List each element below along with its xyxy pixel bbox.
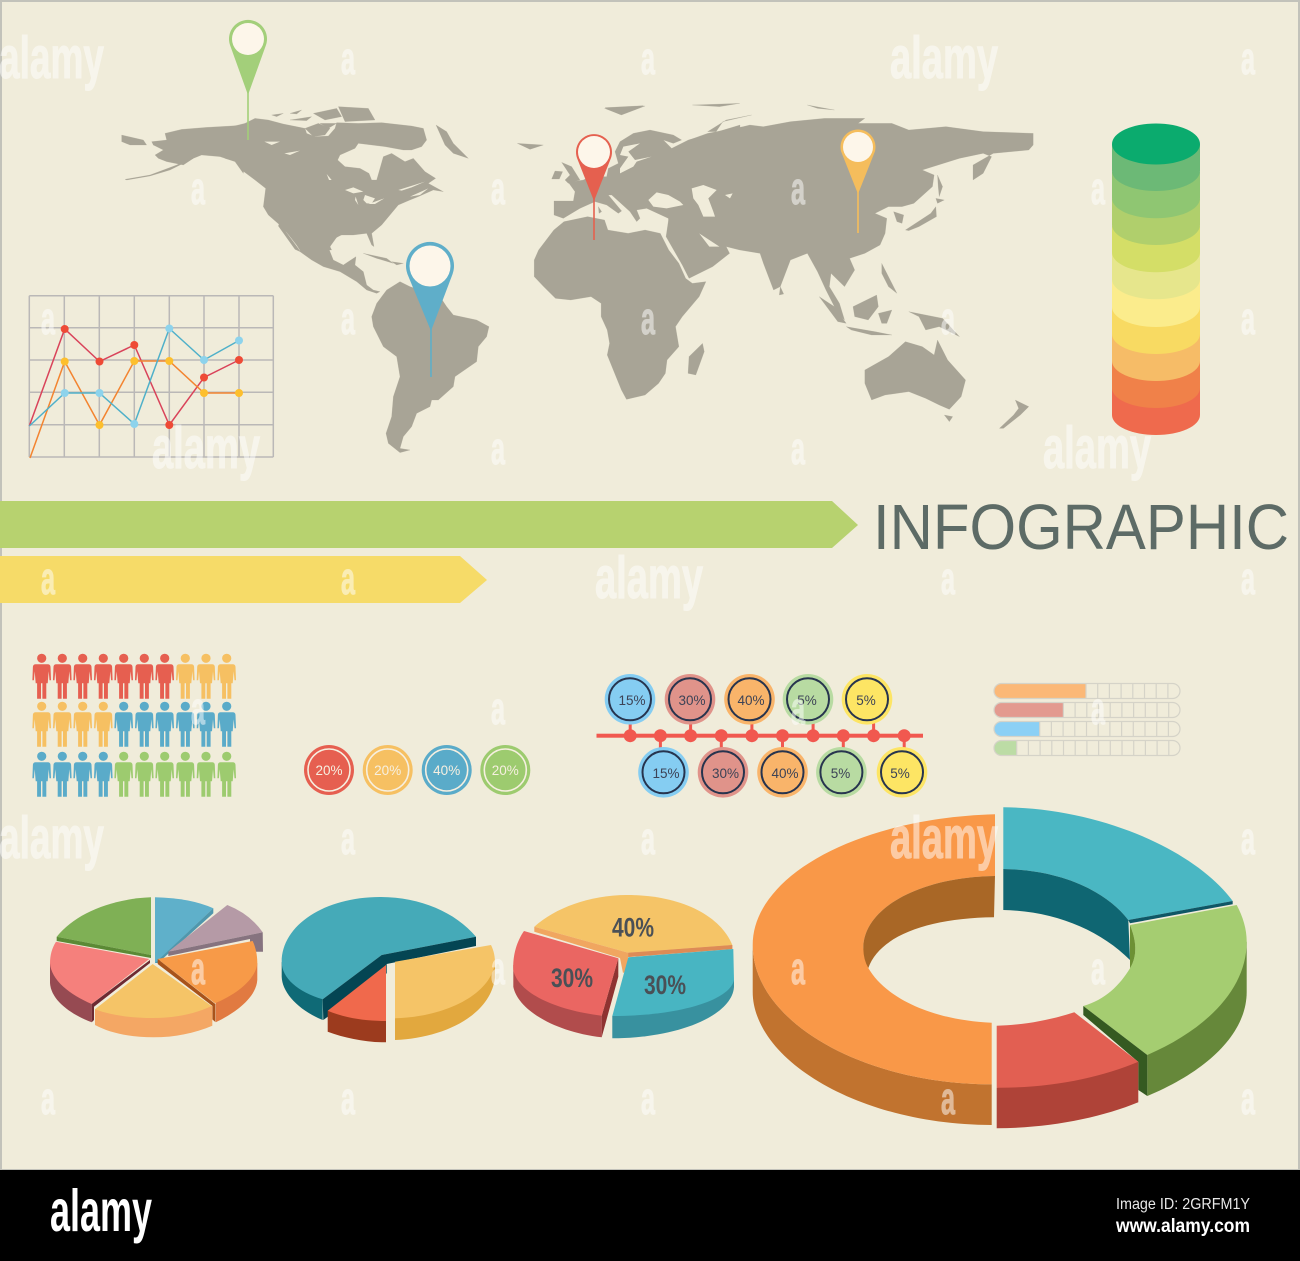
progress bar: blue — [994, 722, 1180, 736]
badge: green 20%: 20% — [492, 763, 519, 778]
timeline top: 15%: 15% — [618, 693, 646, 708]
map: Canada and United States — [225, 107, 443, 250]
badge: blue 40%: 40% — [433, 763, 460, 778]
progress bar: green — [994, 740, 1180, 756]
people row 1 — [32, 654, 236, 699]
pie chart: three slices with large blue — [282, 897, 495, 1042]
timeline axis with nodes — [596, 720, 923, 752]
map pin: orange — [840, 130, 876, 233]
watermarks: alamy — [890, 25, 998, 91]
progress bar: orange — [994, 684, 1180, 698]
map: Africa, Asia and Oceania — [534, 103, 1033, 428]
watermarks: alamy — [890, 805, 998, 871]
slice: teal 30%: 30% — [644, 970, 686, 1000]
badge: yellow 20%: 20% — [374, 763, 401, 778]
watermarks: a — [791, 423, 806, 474]
world map — [122, 103, 1033, 453]
watermarks: a — [641, 813, 656, 864]
map pin: blue — [406, 242, 454, 377]
watermarks: a — [41, 1073, 56, 1124]
slice: green — [57, 897, 151, 958]
slice: 40% — [534, 895, 732, 973]
watermarks: a — [641, 293, 656, 344]
watermarks: a — [341, 813, 356, 864]
timeline bottom: 40% — [757, 747, 808, 798]
watermarks: a — [491, 943, 506, 994]
watermarks: a — [341, 553, 356, 604]
timeline top: 30%: 30% — [678, 693, 706, 708]
timeline top: 5% green — [783, 674, 833, 725]
slice: teal large — [282, 897, 476, 1020]
watermarks: a — [191, 943, 206, 994]
watermarks: a — [791, 163, 806, 214]
timeline top: 5% yellow: 5% — [856, 693, 876, 708]
watermarks: a — [41, 553, 56, 604]
watermarks: a — [791, 683, 806, 734]
timeline top: 5% green: 5% — [797, 693, 817, 708]
watermarks: alamy — [0, 805, 104, 871]
timeline bottom: 15% — [638, 747, 689, 798]
timeline bottom: 15%: 15% — [652, 766, 680, 781]
watermarks: a — [491, 683, 506, 734]
watermarks: a — [1091, 943, 1106, 994]
watermarks: a — [1241, 553, 1256, 604]
watermarks: a — [491, 163, 506, 214]
watermarks: a — [641, 1073, 656, 1124]
line chart — [29, 296, 273, 458]
slice: 40%: 40% — [612, 912, 654, 942]
watermarks: a — [1241, 33, 1256, 84]
watermarks: a — [941, 293, 956, 344]
footer url: www.alamy.com — [1115, 1216, 1250, 1237]
footer logo: alamy — [50, 1178, 152, 1244]
map pin: green — [229, 20, 267, 140]
timeline top: 5% yellow — [842, 674, 892, 725]
timeline — [596, 674, 927, 798]
timeline top: 30% — [665, 674, 715, 725]
watermarks: a — [1241, 293, 1256, 344]
slice: yellow — [95, 964, 212, 1037]
people row 3 — [32, 752, 236, 797]
series: blue line — [29, 324, 243, 428]
series: orange line — [30, 357, 243, 458]
arrow banner: yellow — [0, 556, 487, 603]
progress bars — [994, 684, 1180, 756]
slice: mauve — [168, 905, 263, 956]
people row 2 — [32, 702, 236, 747]
badge: red 20%: 20% — [315, 763, 343, 778]
watermarks: alamy — [595, 545, 703, 611]
people pictogram — [32, 654, 236, 797]
donut segment: orange — [753, 814, 995, 1125]
timeline bottom: 40%: 40% — [771, 766, 799, 781]
watermarks: a — [341, 293, 356, 344]
watermarks: alamy — [152, 415, 260, 481]
watermarks: a — [191, 683, 206, 734]
slice: red small — [328, 965, 386, 1042]
badge: red 20% — [304, 745, 354, 795]
percentage badges — [304, 745, 530, 795]
watermarks: a — [941, 1073, 956, 1124]
stacked cylinder — [1112, 124, 1200, 435]
watermarks: a — [1241, 1073, 1256, 1124]
footer bar — [0, 1170, 1300, 1261]
slice: yellow — [395, 945, 495, 1040]
donut segment: green — [1083, 905, 1247, 1096]
pie chart: 40 30 30 — [513, 895, 734, 1038]
badge: green 20% — [480, 745, 530, 795]
timeline bottom: 5% yellow — [877, 747, 927, 798]
watermarks: a — [1241, 813, 1256, 864]
timeline bottom: 5% yellow: 5% — [890, 766, 910, 781]
map: Alaska, Mexico, Caribbean and South America — [122, 125, 543, 453]
map: Europe — [552, 106, 740, 245]
pie chart: six exploded slices — [50, 897, 263, 1037]
watermarks: a — [341, 33, 356, 84]
badge: blue 40% — [422, 745, 472, 795]
slice: pink — [50, 942, 150, 1022]
donut segment: red — [997, 1012, 1138, 1128]
slice: red 30% — [513, 931, 618, 1037]
slice: blue — [155, 897, 213, 963]
badge: yellow 20% — [363, 745, 413, 795]
donut chart — [753, 807, 1247, 1128]
timeline top: 15% — [605, 674, 655, 725]
timeline top: 40% — [724, 674, 775, 725]
timeline bottom: 5% green: 5% — [831, 766, 850, 781]
slice: red 30%: 30% — [551, 963, 593, 993]
watermarks: alamy — [1043, 415, 1151, 481]
timeline bottom: 5% green — [816, 747, 867, 798]
watermarks: a — [341, 1073, 356, 1124]
timeline bottom: 30% — [698, 747, 748, 798]
watermarks: a — [1091, 163, 1106, 214]
watermarks: a — [791, 943, 806, 994]
watermarks: a — [491, 423, 506, 474]
watermarks: alamy — [0, 25, 104, 91]
watermarks: a — [191, 163, 206, 214]
slice: orange — [158, 941, 257, 1022]
watermarks: a — [941, 553, 956, 604]
slice: teal 30% — [612, 949, 734, 1038]
progress bar: pink — [994, 702, 1180, 718]
footer image id: Image ID: 2GRFM1Y — [1116, 1196, 1250, 1213]
arrow banner: green — [0, 501, 858, 548]
donut segment: teal — [1003, 807, 1233, 960]
series: red line — [29, 325, 243, 429]
watermarks: a — [1091, 683, 1106, 734]
timeline top: 40%: 40% — [737, 693, 765, 708]
watermarks: a — [41, 293, 56, 344]
timeline bottom: 30%: 30% — [712, 766, 739, 781]
map pin: red — [576, 134, 612, 240]
watermarks: a — [641, 33, 656, 84]
